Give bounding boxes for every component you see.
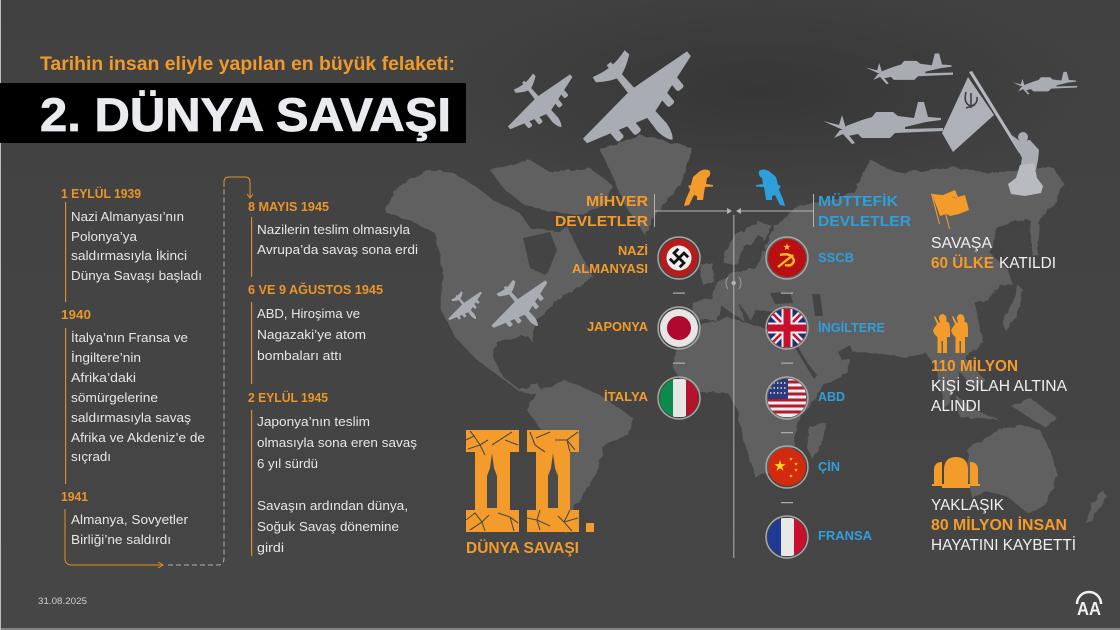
flag: France — [766, 516, 808, 558]
flag: China — [766, 446, 808, 488]
timeline: 1940: İtalya’nın Fransa ve — [71, 330, 188, 345]
timeline: 1 Eylül 1939 — [61, 186, 202, 302]
timeline: 1940: sıçradı — [71, 449, 111, 464]
axis and allies header — [555, 170, 912, 558]
plane: map bomber right — [478, 264, 565, 349]
timeline: 2 Eylül 1945: 6 yıl sürdü — [257, 456, 318, 471]
subtitle: Tarihin insan eliyle yapılan en büyük felaketi: — [40, 53, 455, 75]
flag: Italy — [658, 377, 700, 419]
icon: gravestones — [932, 457, 980, 488]
timeline: 2 Eylül 1945: Japonya’nın teslim — [257, 414, 370, 429]
timeline: 2 Eylül 1945 — [248, 390, 418, 556]
timeline: 6 ve 9 Ağustos 1945: Nagazaki’ye atom — [257, 327, 366, 342]
stat: 110 million: KİŞİ SİLAH ALTINA — [931, 377, 1068, 395]
divider arrows — [654, 194, 814, 558]
logo: AA: AA — [1077, 599, 1101, 619]
timeline: 1940: saldırmasıyla savaş — [71, 410, 192, 425]
timeline: 8 Mayıs 1945: 8 MAYIS 1945 — [248, 199, 329, 214]
axis country labels: İTALYA — [604, 389, 649, 404]
timeline: 1940: 1940 — [61, 307, 91, 322]
timeline: 8 Mayıs 1945: Nazilerin teslim olmasıyla — [257, 222, 411, 237]
allied country labels: ÇİN — [818, 459, 840, 474]
flag: United States — [766, 377, 808, 419]
plane: map bomber left — [440, 282, 492, 333]
plane: large bomber — [557, 20, 724, 183]
axis country labels — [572, 243, 649, 404]
heading: axis powers: MİHVER — [586, 193, 649, 210]
flag: USSR — [766, 237, 808, 279]
title band: 2. DÜNYA SAVAŞI — [40, 88, 451, 141]
timeline: 2 Eylül 1945: girdi — [257, 540, 284, 555]
allied country labels — [818, 250, 885, 543]
flag separators — [673, 292, 793, 503]
plane: right fighter — [1012, 72, 1077, 95]
timeline: 1940 — [61, 307, 205, 484]
stat: 80 million — [931, 457, 1076, 554]
timeline: 2 Eylül 1945: Savaşın ardından dünya, — [257, 498, 408, 513]
timeline: 2 Eylül 1945: olmasıyla sona eren savaş — [257, 435, 418, 450]
icon: orange soldier — [684, 170, 713, 206]
emblem: II with bullets — [466, 430, 594, 557]
world map — [385, 135, 1106, 535]
axis country labels: ALMANYASI — [572, 261, 648, 276]
timeline: 1940: Afrika’daki — [71, 370, 136, 385]
plane: top fighter — [865, 54, 953, 84]
stat: 110 million: ALINDI — [931, 398, 981, 415]
plane: small bomber — [492, 56, 592, 153]
timeline: 6 ve 9 Ağustos 1945 — [248, 282, 383, 384]
date: 31.08.2025 — [38, 596, 87, 607]
timeline: 2 Eylül 1945: 2 EYLÜL 1945 — [248, 390, 328, 405]
timeline: 1941: 1941 — [61, 489, 88, 504]
flag: United Kingdom — [766, 307, 808, 349]
icon: flags — [931, 190, 969, 229]
timeline: 1941: Birliği’ne saldırdı — [71, 532, 171, 547]
timeline: 8 Mayıs 1945: Avrupa’da savaş sona erdi — [257, 242, 418, 257]
stat: 110 million — [931, 314, 1068, 415]
plane: large fighter — [823, 102, 943, 144]
allied country labels: SSCB — [818, 250, 854, 265]
timeline: 1941: Almanya, Sovyetler — [71, 512, 189, 527]
statue with soviet flag — [942, 71, 1043, 196]
heading: allied powers: MÜTTEFİK — [818, 193, 899, 210]
icon: soldiers — [933, 314, 968, 353]
timeline: 1940: Afrika ve Akdeniz’e de — [71, 430, 205, 445]
heading: axis powers: DEVLETLER — [555, 214, 649, 230]
stat: 60 countries — [931, 190, 1056, 272]
heading: allied powers: DEVLETLER — [818, 214, 912, 230]
timeline connector — [65, 177, 253, 568]
stat: 80 million: HAYATINI KAYBETTİ — [931, 536, 1076, 554]
allied country labels: FRANSA — [818, 528, 873, 543]
timeline: 1 Eylül 1939: saldırmasıyla İkinci — [71, 248, 187, 263]
timeline: 8 Mayıs 1945 — [248, 199, 418, 277]
timeline: 6 ve 9 Ağustos 1945: ABD, Hiroşima ve — [257, 306, 360, 321]
timeline: 6 ve 9 Ağustos 1945: 6 VE 9 AĞUSTOS 1945 — [248, 282, 383, 297]
allied country labels: İNGİLTERE — [818, 320, 885, 335]
timeline: 1940: İngiltere’nin — [71, 350, 141, 365]
timeline: 1 Eylül 1939: Nazi Almanyası’nın — [71, 209, 184, 224]
stat: 60 countries: 60 ÜLKE — [931, 255, 994, 272]
emblem: II with bullets: DÜNYA SAVAŞI — [466, 540, 579, 557]
axis country labels: JAPONYA — [587, 319, 649, 334]
timeline: 1 Eylül 1939: Polonya’ya — [71, 229, 138, 244]
background shading — [430, 0, 1090, 200]
timeline: 1 Eylül 1939: 1 EYLÜL 1939 — [61, 186, 141, 201]
heading: allied powers — [818, 193, 912, 230]
icon: blue soldier — [756, 170, 785, 206]
timeline: 1 Eylül 1939: Dünya Savaşı başladı — [71, 268, 202, 283]
timeline: 6 ve 9 Ağustos 1945: bombaları attı — [257, 348, 342, 363]
timeline: 1940: sömürgelerine — [71, 390, 158, 405]
flag: Japan — [658, 307, 700, 349]
stat: 80 million: 80 MİLYON İNSAN — [931, 517, 1067, 534]
timeline: 2 Eylül 1945: Soğuk Savaş dönemine — [257, 519, 399, 534]
allied country labels: ABD — [818, 389, 845, 404]
logo: AA — [1077, 592, 1101, 619]
stat: 80 million: YAKLAŞIK — [931, 497, 1005, 514]
stat: 110 million: 110 MİLYON — [931, 358, 1018, 375]
flag: Nazi Germany — [658, 237, 700, 279]
timeline: 1941 — [61, 489, 189, 547]
heading: axis powers — [555, 193, 649, 230]
axis country labels: NAZİ — [618, 243, 648, 258]
stat: 60 countries: SAVAŞA — [931, 235, 993, 252]
stat: 60 countries: KATILDI — [999, 255, 1056, 272]
